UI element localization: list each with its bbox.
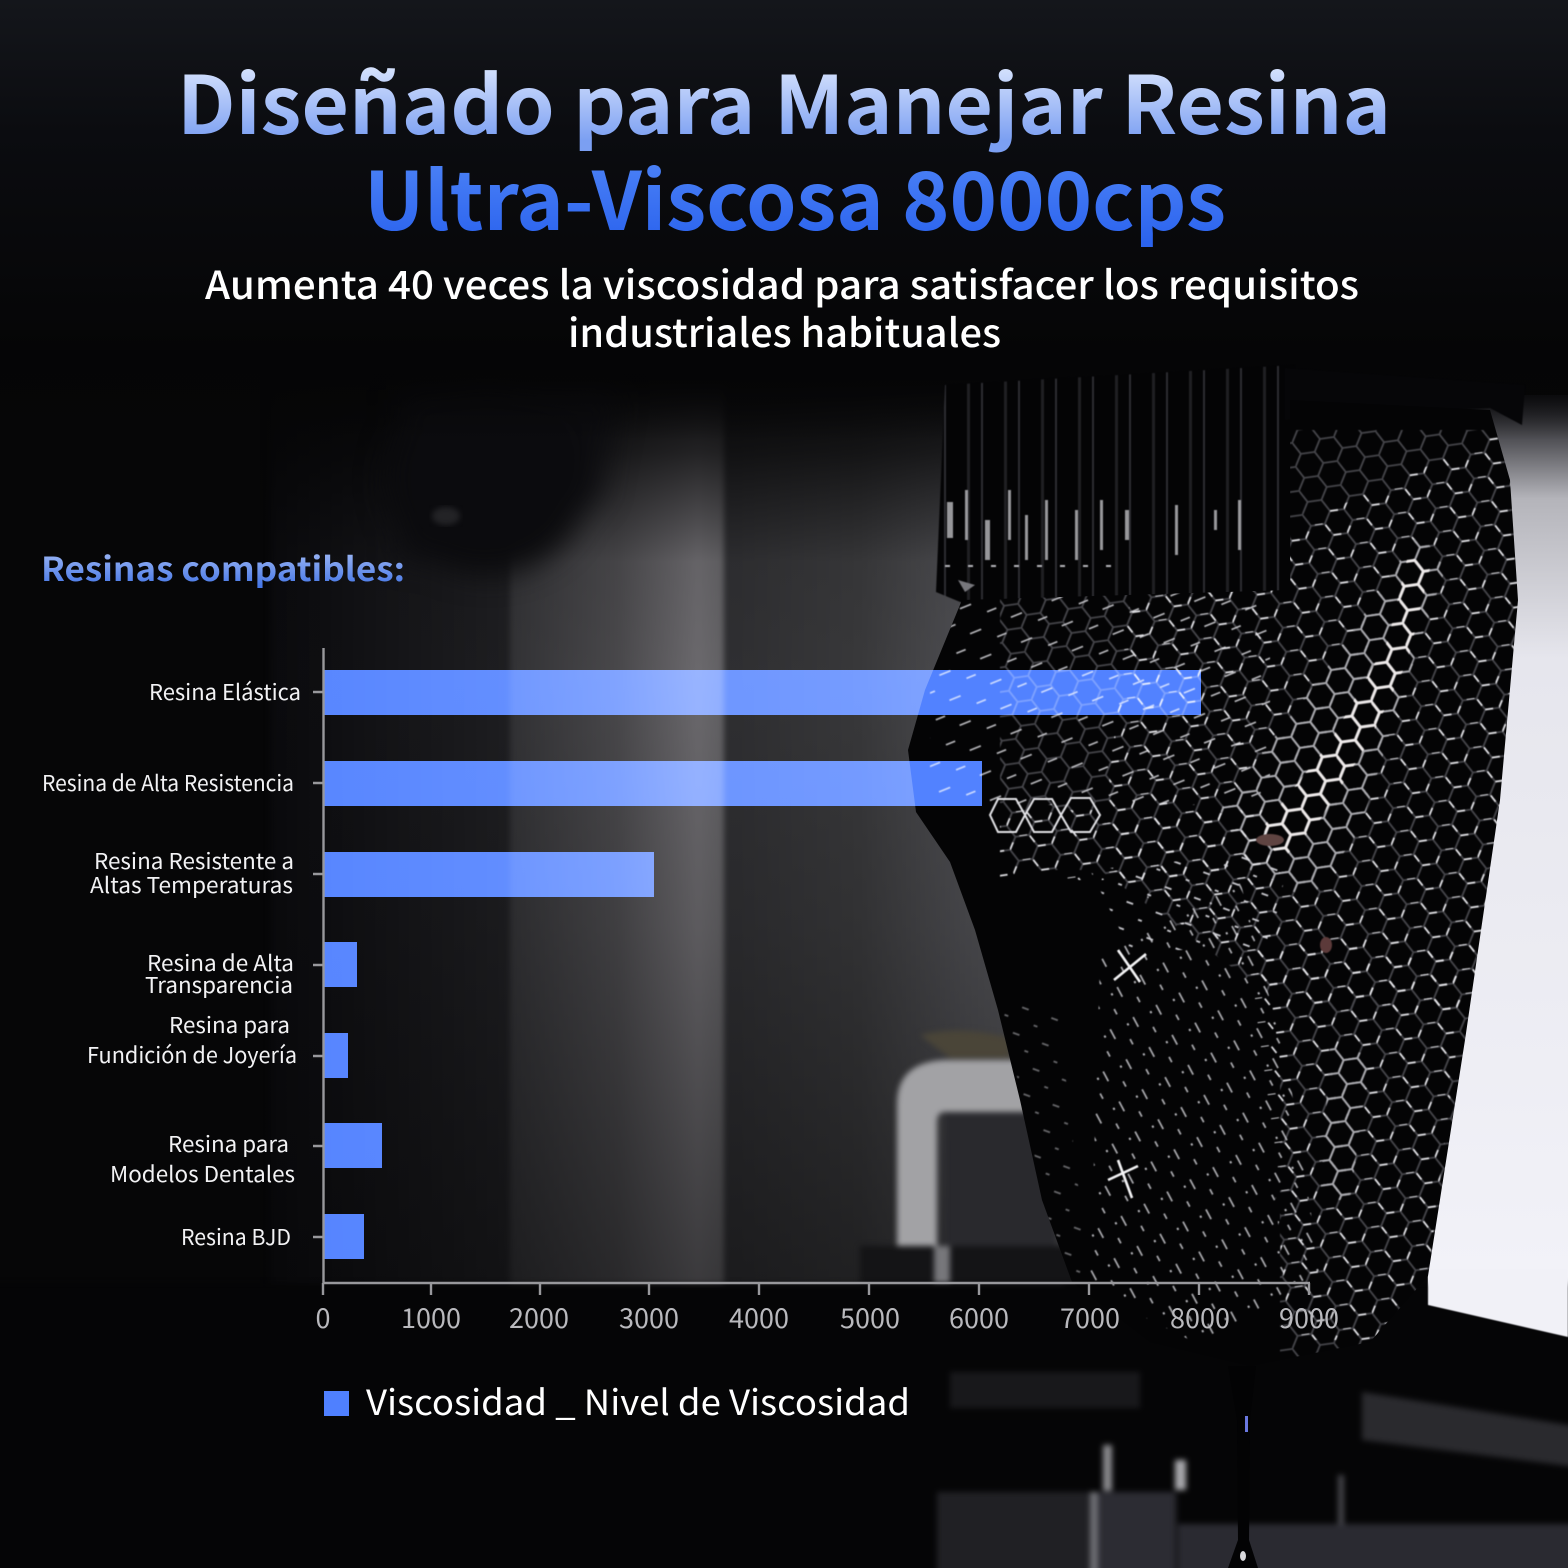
blurred round housing (385, 385, 620, 575)
bright right wall (1400, 395, 1568, 1337)
x-axis numbers: 4000 (729, 1297, 789, 1336)
3D printed lattice face (908, 409, 1518, 1356)
reddish resin spots (1256, 834, 1284, 846)
star glints (1108, 950, 1146, 1198)
x-axis numbers: 7000 (1060, 1297, 1120, 1336)
category labels: Altas Temperaturas (90, 868, 293, 900)
title: Ultra-Viscosa 8000cps (364, 138, 1226, 254)
printed support columns (936, 365, 1525, 615)
x-axis numbers: 8000 (1170, 1297, 1230, 1336)
bar chart: resin viscosity (42, 648, 1339, 1336)
title (177, 42, 1391, 254)
subtitle: Aumenta 40 veces la viscosidad para satisfacer los requisitos (205, 255, 1359, 311)
category labels: Transparencia (145, 968, 293, 1000)
lower machine parts (0, 1284, 1568, 1568)
subtitle (205, 255, 1359, 359)
category labels (42, 675, 301, 1252)
x-axis numbers: 5000 (840, 1297, 900, 1336)
category labels: Modelos Dentales (110, 1157, 295, 1189)
legend: Viscosidad _ Nivel de Viscosidad (366, 1375, 910, 1426)
bright cheek hexagons (990, 798, 1100, 832)
title: Diseñado para Manejar Resina (177, 42, 1391, 158)
category labels: Resina Resistente a (94, 844, 294, 876)
category labels: Fundición de Joyería (87, 1038, 297, 1070)
category labels: Resina para (169, 1008, 290, 1040)
category labels: Resina BJD (181, 1220, 291, 1252)
x-axis numbers: 1000 (401, 1297, 461, 1336)
x-axis numbers: 0 (316, 1297, 330, 1336)
background monitor frame (860, 1031, 1100, 1286)
chart axes and ticks (313, 648, 1310, 1295)
category labels: Resina para (168, 1127, 289, 1159)
blurred wall panels (270, 380, 1064, 1290)
resin drip (1228, 1366, 1258, 1568)
chart heading: Resinas compatibles: (41, 543, 405, 591)
lens glint (432, 507, 460, 525)
category labels: Resina de Alta Resistencia (42, 766, 294, 798)
x-axis numbers: 9000 (1279, 1297, 1339, 1336)
category labels: Resina Elástica (149, 675, 301, 707)
bars (324, 670, 1201, 1259)
x-axis numbers: 6000 (949, 1297, 1009, 1336)
x-axis numbers: 2000 (509, 1297, 569, 1336)
bright wall lower edge (1428, 1270, 1568, 1337)
x-axis numbers: 3000 (619, 1297, 679, 1336)
category labels: Resina de Alta (147, 946, 294, 978)
x-axis numbers (316, 1297, 1339, 1336)
subtitle: industriales habituales (568, 303, 1001, 359)
